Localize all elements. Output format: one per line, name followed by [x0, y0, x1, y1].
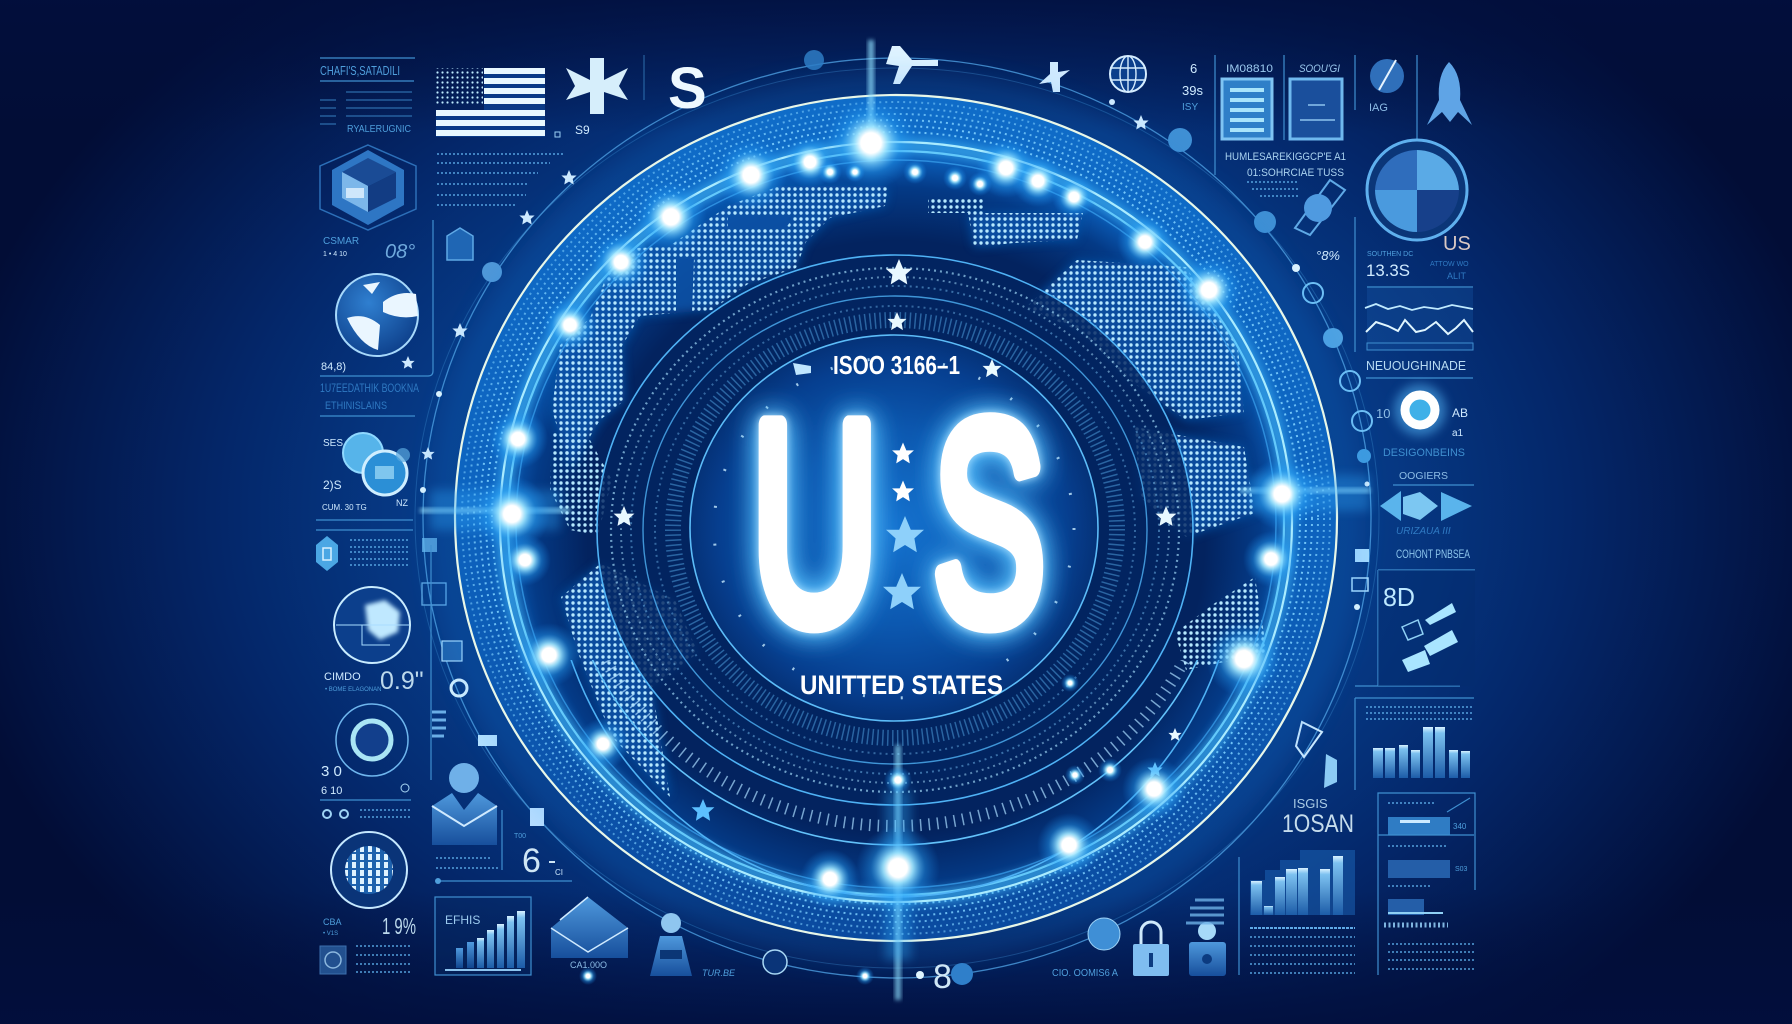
stat: 19%: • V1S: [323, 931, 338, 937]
center disc: [690, 335, 1098, 721]
icon: grid circle: [331, 832, 407, 908]
icon: bottom globe: [1088, 918, 1120, 950]
stat: 1OSAN: 1OSAN: [1282, 810, 1354, 838]
panel: report rows: 340: [1453, 822, 1467, 831]
icon: person socket: [1186, 900, 1226, 976]
map stars: [614, 259, 1182, 821]
big S and label: [555, 55, 707, 137]
big S and label: S: [668, 56, 707, 121]
icon: house badge: [447, 228, 473, 260]
icon: tool: °8%: [1316, 248, 1340, 263]
icon: glowing ring: 10: [1376, 406, 1390, 421]
panel: mini bar chart: [435, 897, 531, 975]
icon: asterisk: [566, 58, 628, 114]
inner tech rings: [597, 255, 1193, 805]
icon: bottom envelope: CA1.00O: [570, 960, 607, 970]
panel: tickets: COHONT PNBSEA: [1396, 547, 1470, 561]
panel: tickets: [1355, 547, 1475, 686]
stat: 6: CI: [555, 868, 563, 877]
text block: design: DESIGONBEINS: [1383, 447, 1465, 459]
icon: arrows: URIZAUA III: [1396, 526, 1451, 537]
icon: globes top: [804, 50, 824, 70]
right top stat: [1182, 55, 1417, 200]
icon: document cards: SOOU'GI: [1299, 63, 1340, 75]
panel: top left heading block: [320, 58, 415, 135]
title: ISOO 3166-1: ISOO 3166–1: [833, 350, 960, 380]
pie chart: US: [1443, 233, 1471, 255]
icon: document cards: [1222, 63, 1342, 139]
bottom center labels and icons: [702, 950, 1118, 996]
text lines under flag: [437, 154, 565, 205]
panel: globe card: [320, 220, 433, 376]
world map area: [500, 142, 1292, 902]
right top stat: ISY: [1182, 102, 1198, 113]
icon: dial: IAG: [1369, 102, 1388, 114]
icon: US flag: [436, 68, 545, 137]
stat: 19%: [320, 913, 416, 974]
stat: 19%: 1 9%: [382, 913, 416, 939]
icon: dial: [1369, 59, 1404, 114]
stat: 13.3S: 13.3S: [1366, 261, 1410, 280]
line chart: [1365, 287, 1473, 378]
stat: 13.3S: SOUTHEN DC: [1367, 251, 1413, 258]
big S and label: S9: [575, 123, 590, 137]
panel: shield with text: [316, 536, 410, 571]
stat: 19%: CBA: [323, 917, 342, 927]
icon: glowing ring: a1: [1452, 428, 1464, 439]
icon: airplanes: [886, 46, 938, 84]
panel: globe card: CSMAR: [323, 236, 359, 247]
stat: 6: [435, 833, 572, 884]
bottom center labels and icons: CIO. OOMIS6 A: [1052, 968, 1118, 979]
icon: glowing ring: [1376, 384, 1468, 439]
panel: bar chart with text: [1355, 698, 1474, 790]
big letters US: [751, 363, 1045, 682]
panel: top left heading block: RYALERUGNIC: [347, 124, 411, 135]
text block: design: [1383, 447, 1474, 485]
stat: 0.9: 0.9": [380, 667, 424, 695]
text block: right heading: [1225, 151, 1346, 196]
glowing network nodes: [474, 97, 1318, 910]
text block: right heading: 01:SOHRCIAE TUSS: [1247, 167, 1344, 179]
icon: small globes right orbit: [1168, 128, 1192, 152]
stat: 1OSAN: [1282, 796, 1354, 838]
icon: tool: [1295, 180, 1345, 263]
icon: bubble cluster: [322, 433, 410, 512]
stat: 13.3S: ALIT: [1447, 271, 1467, 281]
icon: hexagon with building: [320, 145, 416, 230]
big letters US: U: [751, 364, 879, 682]
icon: globe scope: [334, 587, 410, 663]
text block: design: OOGIERS: [1399, 471, 1448, 482]
right top stat: 39s: [1182, 83, 1203, 98]
icon: bubble cluster: CUM. 30 TG: [322, 503, 367, 512]
icon: column of four stars: [883, 442, 924, 609]
subtitle: UNITED STATES: UNITTED STATES: [800, 670, 1003, 700]
icon: small stars beside ISO label: [793, 359, 1002, 377]
icon: bottom person: [650, 913, 692, 976]
main ring: glowing concentric lines: [500, 142, 1292, 902]
icon: globe: [336, 274, 418, 356]
icon: bottom envelope: [551, 897, 628, 985]
icon: bubble cluster: SES: [323, 438, 343, 449]
right top stat: 6: [1190, 61, 1197, 76]
stat: 13.3S: ATTOW WO: [1430, 261, 1469, 268]
big bar chart: [1239, 850, 1355, 975]
icon: ring gauge: [321, 704, 409, 797]
icon: bubble cluster: 2)S: [323, 478, 342, 492]
bottom center labels and icons: TUR.BE: [702, 968, 736, 978]
panel: tickets: 8D: [1383, 582, 1415, 612]
line chart: NEUOUGHINADE: [1366, 358, 1466, 373]
icon: target ring: [451, 680, 467, 696]
icon: glowing ring: AB: [1452, 406, 1468, 420]
lower concentric arcs: [570, 660, 1220, 898]
bottom center labels and icons: 8: [933, 958, 952, 996]
text block: left label: ETHINISLAINS: [325, 400, 387, 412]
main ring: dotted outer band: [455, 95, 1337, 941]
map: land dots: [550, 186, 1267, 797]
stat: 13.3S: [1355, 217, 1469, 352]
text block: left label: [316, 381, 419, 530]
pie chart: [1367, 140, 1471, 255]
panel: top left heading block: CHAFI'S,SATADILI: [320, 63, 400, 78]
icon: arrows: [1380, 491, 1472, 537]
small legend row: [320, 800, 412, 818]
light beams: [420, 40, 1370, 1000]
main ring: outer glow: [448, 88, 1344, 948]
icon: document cards: IM08810: [1226, 63, 1273, 75]
icon: rocket: [1427, 62, 1472, 125]
orbit ring with small icons: [415, 46, 1379, 978]
stat: 6: T00: [514, 833, 526, 840]
icon: person with envelope: [431, 545, 502, 870]
stat: 6: 6: [522, 842, 541, 880]
icon: padlock: [1133, 922, 1169, 976]
stat: 0.9: CIMDO: [324, 671, 361, 683]
text block: right heading: HUMLESAREKIGGCP'E A1: [1225, 151, 1346, 163]
stat: 1OSAN: ISGIS: [1293, 796, 1328, 811]
icon: ring gauge: 3 0: [321, 763, 342, 780]
panel: report rows: S03: [1455, 866, 1468, 873]
main ring: bright edge line: [455, 95, 1337, 941]
big letters US: S: [933, 363, 1045, 682]
icon: ring gauge: 6 10: [321, 785, 342, 797]
stat: 0.9: [324, 667, 424, 695]
panel: mini bar chart: EFHIS: [445, 913, 480, 927]
panel: globe card: 84,8): [321, 361, 346, 373]
panel: report rows: [1378, 793, 1475, 975]
text block: left label: 1U7EEDATHIK BOOKNA: [320, 381, 419, 395]
panel: globe card: 08°: [385, 241, 415, 263]
panel: globe card: 1 • 4 10: [323, 251, 347, 258]
icon: bubble cluster: NZ: [396, 498, 408, 508]
stat: 0.9: • BOME ELAGONAN: [325, 687, 381, 693]
